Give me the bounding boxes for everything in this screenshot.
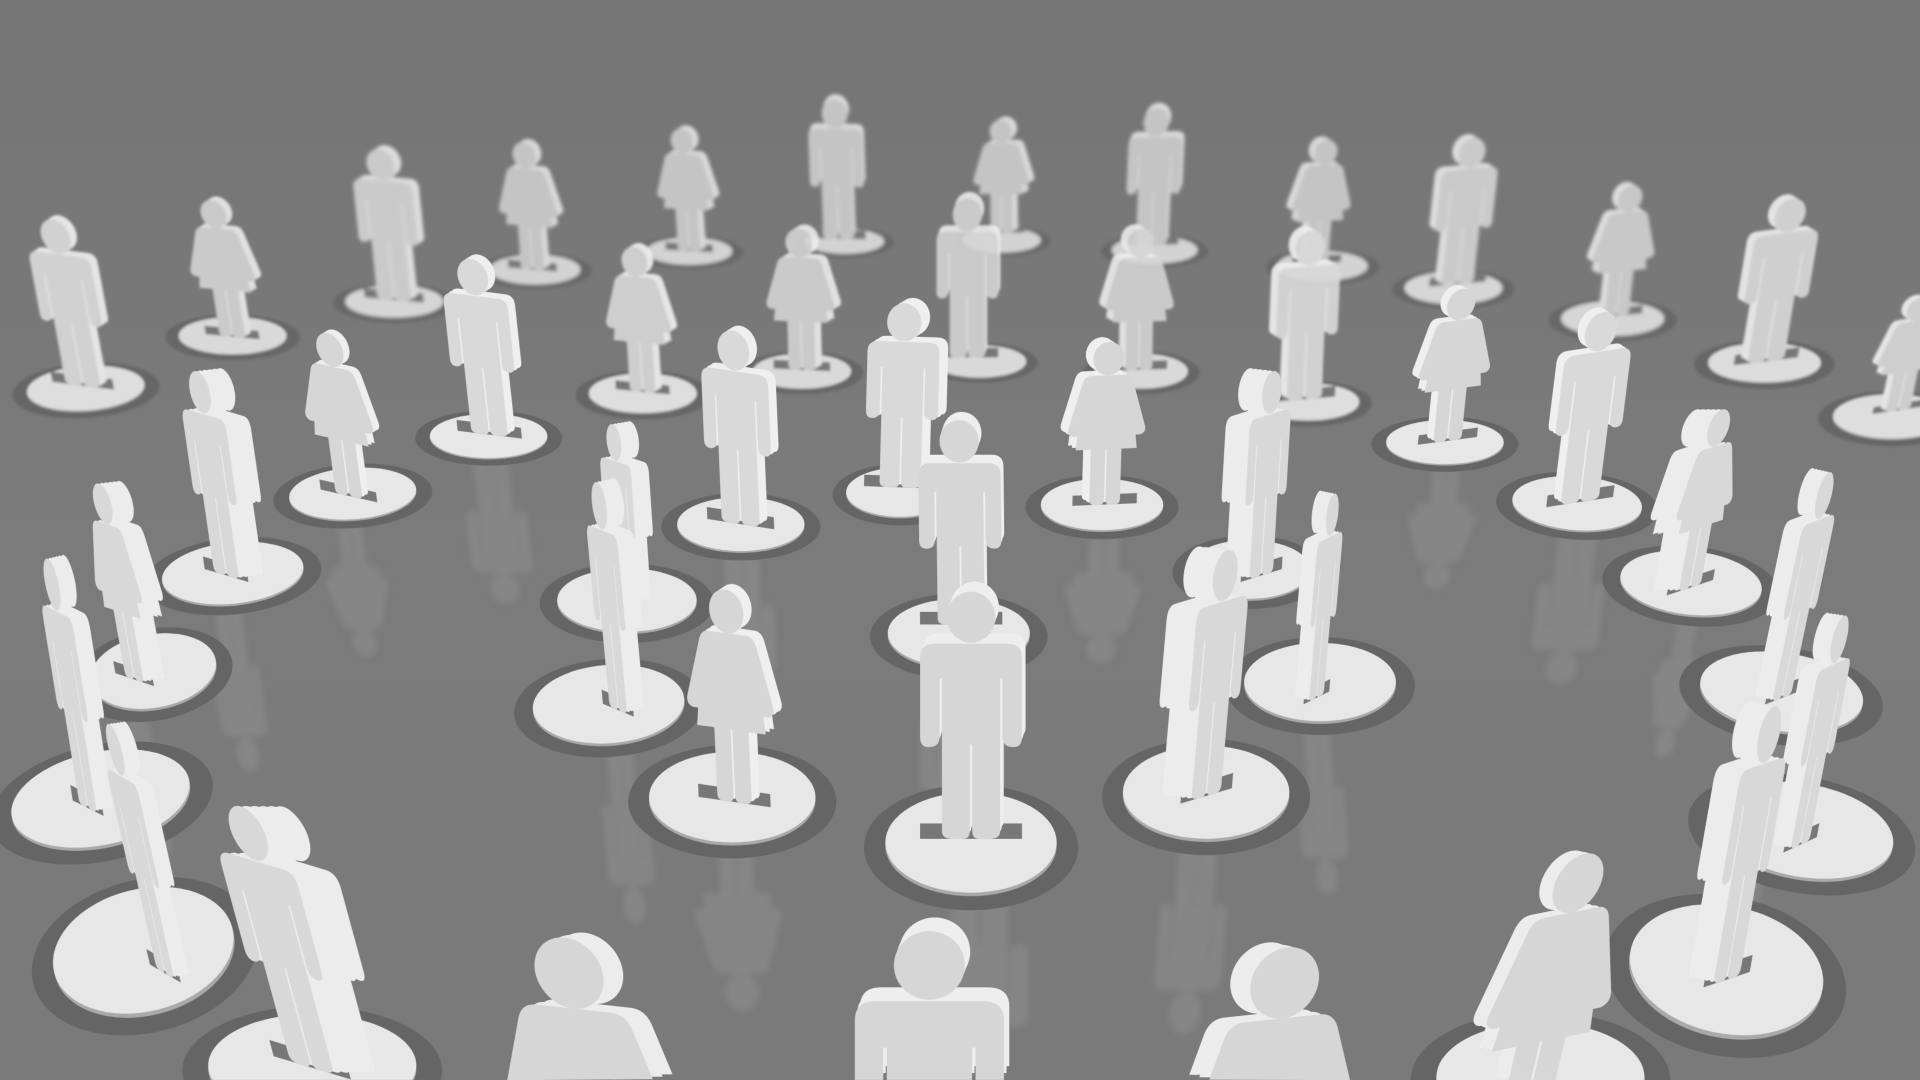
figure: woman, back row [953, 116, 1051, 257]
figure: man, fourth row [870, 412, 1048, 679]
figure: woman, third row [1026, 335, 1179, 539]
figure: man, back row right [1694, 190, 1835, 389]
figure: man, third row left [141, 354, 325, 623]
figure: large man, foreground left [182, 781, 442, 1080]
figure: man, back row left [11, 210, 161, 423]
figure: large woman, foreground right [1411, 835, 1670, 1080]
figure: man, sixth row left [15, 702, 275, 1058]
figure: man, fourth row [511, 464, 707, 763]
figure: large woman, foreground [488, 922, 676, 1080]
figure: woman, back row [636, 123, 743, 269]
figure: woman, second row [741, 223, 863, 394]
figure: man, sixth row right [1589, 685, 1862, 1079]
figure: woman, third row right [1598, 391, 1783, 635]
figure: man, fourth row [1225, 477, 1415, 735]
figure: woman, second row [576, 239, 710, 420]
figure: man, second row [415, 250, 562, 466]
figure: man, back row [796, 94, 894, 258]
figure: man, fourth row right [1673, 454, 1889, 758]
figure: woman, back row [478, 136, 592, 289]
figure: man, third row [661, 319, 820, 560]
figure: man, fifth row [1102, 530, 1310, 855]
figure: man, fifth row right [1678, 596, 1920, 912]
figure: large man, foreground centre [855, 917, 1009, 1080]
figure: man, second row [1243, 223, 1372, 426]
figure: woman, second row [1371, 279, 1518, 472]
figure: woman, back row [1548, 178, 1677, 342]
figure: woman, second row [1083, 223, 1199, 394]
figure: man, centre front [864, 582, 1078, 910]
figure: woman, fourth row left [67, 466, 240, 734]
figure: man, third row [833, 296, 967, 525]
figure: man, third row [1172, 354, 1326, 609]
figure: woman, back row [165, 193, 300, 360]
figure: man, fifth row left [0, 538, 224, 883]
figure: large woman, foreground [1188, 932, 1361, 1080]
floor reflections [110, 456, 1805, 1068]
figure: man, back row [1101, 102, 1208, 268]
figure: woman, fifth row [628, 577, 836, 858]
figure: man, back row [1392, 131, 1515, 309]
figure: man, second row [921, 192, 1038, 383]
figure: woman, second row [271, 320, 434, 534]
figure: man, back row [333, 142, 456, 323]
figure: woman, right edge [1818, 289, 1920, 446]
figure: woman, back row [1266, 134, 1379, 286]
figure: man, second row [1494, 301, 1660, 545]
figure: man, third row [540, 410, 714, 643]
